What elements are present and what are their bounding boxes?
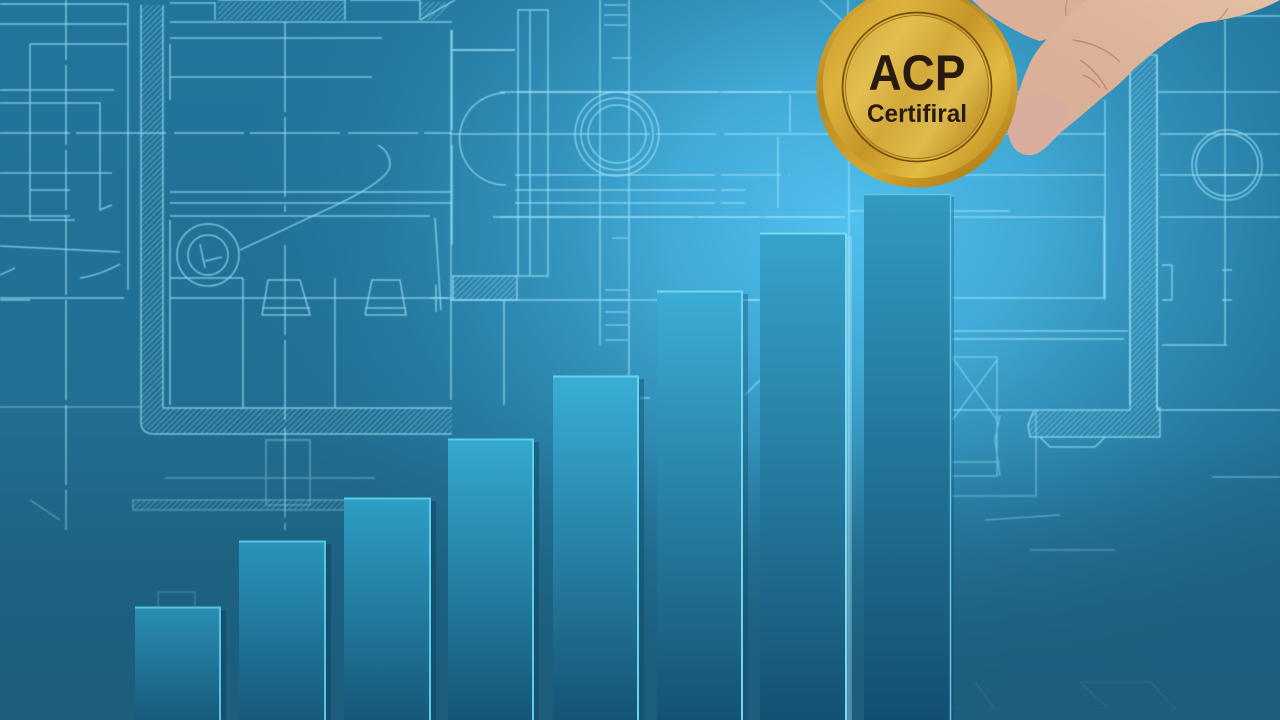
lower left room details xyxy=(0,300,760,607)
bar 2 xyxy=(239,541,331,720)
icon: upper finger xyxy=(972,0,1100,41)
icon: thumbnail and knuckle creases xyxy=(1009,0,1228,154)
bar 6 xyxy=(657,291,748,720)
hand holding coin xyxy=(972,0,1280,155)
bar 7 xyxy=(760,233,852,720)
coin label: ACP: ACP xyxy=(868,45,966,101)
bar 1 xyxy=(135,607,226,720)
darkening fade over lower blueprint xyxy=(0,440,1280,720)
valve circle with curved pipe xyxy=(177,145,390,286)
main room lines xyxy=(170,22,452,530)
coin label: Certifiral: Certifiral xyxy=(867,100,967,128)
small equipment marks xyxy=(0,280,448,315)
right room details xyxy=(848,16,1280,447)
bar chart xyxy=(135,194,954,720)
ACP Certified gold coin xyxy=(816,0,1018,188)
bar 5 xyxy=(553,376,644,720)
coin rim xyxy=(816,0,1018,188)
coin inner face xyxy=(845,15,989,159)
bar 8 xyxy=(864,194,954,720)
floor marks bottom right xyxy=(950,682,1280,708)
central blueprint elements xyxy=(450,0,1010,405)
bar 3 xyxy=(344,498,436,720)
lower right room details xyxy=(952,357,1280,550)
left wall and floor hatching xyxy=(141,0,455,434)
icon: thumb xyxy=(1008,0,1280,155)
far-left room details xyxy=(0,0,452,530)
top right diagonal marks xyxy=(820,0,849,720)
bar 4 xyxy=(448,439,539,720)
